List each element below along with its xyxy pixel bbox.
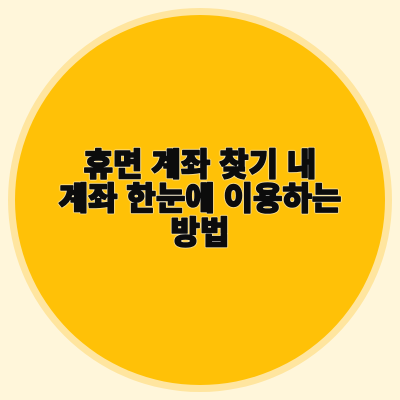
title	[59, 146, 341, 250]
title: 방법	[171, 214, 229, 250]
title: 휴면 계좌 찾기 내	[84, 146, 316, 182]
title: 계좌 한눈에 이용하는	[59, 180, 341, 216]
